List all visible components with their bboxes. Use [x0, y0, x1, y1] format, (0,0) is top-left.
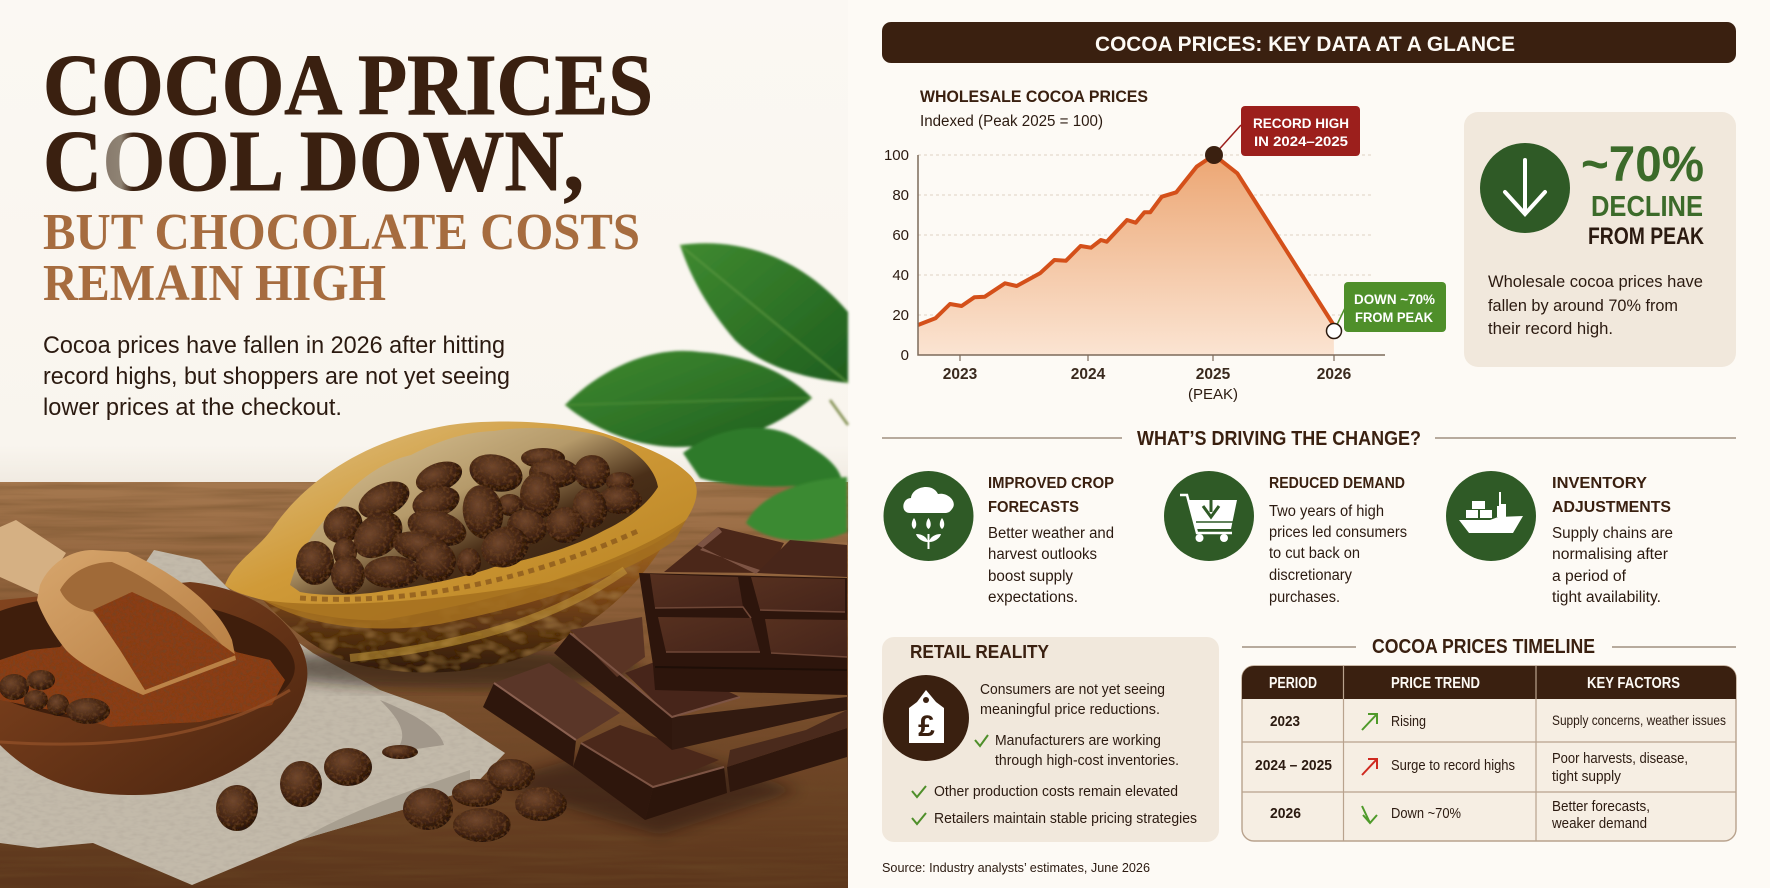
- driver: inventory adjustments: INVENTORY: [1552, 475, 1647, 492]
- driver: reduced demand: purchases.: [1269, 589, 1340, 606]
- icon: pound price tag: [883, 675, 969, 761]
- x axis labels: 2023: [943, 366, 978, 383]
- section heading: what's driving the change: WHAT’S DRIVING THE CHANGE?: [1137, 428, 1421, 450]
- callout: down 70 percent: [1326, 282, 1446, 338]
- table row: 2024 to 2025: Poor harvests, disease,: [1552, 751, 1688, 767]
- title: COCOA PRICES: [43, 36, 653, 133]
- icon: pound price tag: £: [918, 710, 935, 743]
- driver: inventory adjustments: normalising after: [1552, 546, 1668, 563]
- y axis labels: 20: [892, 307, 909, 324]
- table row: 2023: Rising: [1391, 714, 1426, 730]
- checklist: Other production costs remain elevated: [934, 784, 1178, 800]
- driver: inventory adjustments: Supply chains are: [1552, 525, 1673, 542]
- chart heading: [920, 87, 1148, 130]
- icon: stacked dark chocolate bars: [483, 527, 847, 835]
- table: cocoa prices timeline: [1242, 666, 1736, 841]
- cloth: [0, 550, 505, 885]
- title: COOL DOWN,: [43, 112, 584, 209]
- driver: reduced demand: discretionary: [1269, 567, 1352, 584]
- subtitle: [43, 204, 640, 312]
- icon: cocoa pod with beans: [225, 421, 697, 688]
- back bars: [664, 527, 784, 573]
- panel: 70 percent decline: FROM PEAK: [1588, 223, 1705, 250]
- table row: 2024 to 2025: tight supply: [1552, 769, 1622, 785]
- driver: inventory adjustments: ADJUSTMENTS: [1552, 499, 1671, 516]
- driver: reduced demand: Two years of high: [1269, 503, 1384, 520]
- panel: 70 percent decline: [1464, 112, 1736, 367]
- chart heading: WHOLESALE COCOA PRICES: [920, 87, 1148, 106]
- table row: 2026: 2026: [1270, 805, 1301, 822]
- driver: improved crop forecasts: [884, 471, 1114, 606]
- table header row: [1269, 675, 1680, 692]
- driver: improved crop forecasts: FORECASTS: [988, 499, 1079, 516]
- y axis labels: 0: [901, 347, 909, 364]
- driver: reduced demand: prices led consumers: [1269, 524, 1407, 541]
- driver: reduced demand: to cut back on: [1269, 545, 1360, 562]
- intro paragraph: Cocoa prices have fallen in 2026 after hitting: [43, 332, 505, 359]
- checklist: Retailers maintain stable pricing strategies: [934, 811, 1197, 827]
- panel: retail reality: RETAIL REALITY: [910, 641, 1050, 662]
- table row: 2026: Down ~70%: [1391, 806, 1461, 822]
- checklist: Manufacturers are working: [995, 733, 1161, 749]
- table row: 2024 to 2025: 2024 – 2025: [1255, 757, 1332, 774]
- panel: 70 percent decline: fallen by around 70% from: [1488, 296, 1678, 315]
- chart heading: Indexed (Peak 2025 = 100): [920, 113, 1103, 130]
- x axis labels: 2026: [1317, 366, 1352, 383]
- bottom bar: [727, 728, 847, 792]
- panel: hero photo of cocoa and chocolate: [0, 0, 848, 888]
- y axis labels: 100: [884, 147, 909, 164]
- driver: improved crop forecasts: harvest outlooks: [988, 546, 1097, 563]
- panel: retail reality: [882, 637, 1219, 842]
- panel: retail reality: meaningful price reductions.: [980, 702, 1160, 718]
- icon: green cocoa leaves: [565, 243, 848, 541]
- panel: retail reality: Consumers are not yet seeing: [980, 682, 1165, 698]
- table header row: PRICE TREND: [1391, 675, 1480, 692]
- x axis labels: 2024: [1071, 366, 1106, 383]
- panel: 70 percent decline: their record high.: [1488, 319, 1613, 338]
- callout: record high: RECORD HIGH: [1253, 115, 1349, 131]
- driver: improved crop forecasts: Better weather and: [988, 525, 1114, 542]
- driver: inventory adjustments: tight availability.: [1552, 589, 1661, 606]
- intro paragraph: record highs, but shoppers are not yet seeing: [43, 363, 510, 390]
- icon: down arrow: [1480, 143, 1570, 233]
- top bar: [639, 573, 847, 695]
- icon: rain cloud and sprout: [884, 471, 974, 561]
- header bar: key data: COCOA PRICES: KEY DATA AT A GLANCE: [1095, 33, 1515, 56]
- checklist: [912, 733, 1197, 827]
- header bar: key data: [882, 22, 1736, 63]
- driver: reduced demand: REDUCED DEMAND: [1269, 475, 1405, 492]
- panel: 70 percent decline: DECLINE: [1591, 191, 1703, 223]
- subtitle: REMAIN HIGH: [43, 255, 386, 312]
- table row: 2026: [1270, 799, 1650, 832]
- callout: down 70 percent: DOWN ~70%: [1354, 292, 1435, 307]
- callout: down 70 percent: FROM PEAK: [1355, 310, 1433, 325]
- callout: record high: [1205, 106, 1360, 164]
- table header row: PERIOD: [1269, 675, 1317, 692]
- callout: record high: IN 2024–2025: [1254, 133, 1348, 149]
- driver: improved crop forecasts: IMPROVED CROP: [988, 475, 1114, 492]
- intro paragraph: [43, 332, 510, 421]
- panel: 70 percent decline: ~70%: [1581, 136, 1704, 192]
- y axis labels: [884, 147, 909, 364]
- middle bar: [672, 697, 847, 750]
- table row: 2023: [1270, 712, 1726, 730]
- driver: inventory adjustments: a period of: [1552, 568, 1627, 585]
- table header row: KEY FACTORS: [1587, 675, 1680, 692]
- y axis labels: 60: [892, 227, 909, 244]
- line chart: wholesale cocoa prices: [884, 106, 1446, 403]
- icon: loose cocoa beans: [216, 745, 567, 842]
- driver: reduced demand: [1164, 471, 1407, 606]
- y axis labels: 80: [892, 187, 909, 204]
- driver: inventory adjustments: [1446, 471, 1673, 606]
- title: [43, 36, 653, 209]
- table row: 2024 to 2025: [1255, 751, 1688, 785]
- x axis labels: (PEAK): [1188, 386, 1238, 403]
- source note: Source: Industry analysts’ estimates, June 2026: [882, 860, 1150, 875]
- table row: 2026: Better forecasts,: [1552, 799, 1650, 815]
- driver: improved crop forecasts: expectations.: [988, 589, 1078, 606]
- table row: 2026: weaker demand: [1551, 816, 1647, 832]
- intro paragraph: lower prices at the checkout.: [43, 394, 342, 421]
- x axis labels: [943, 366, 1352, 403]
- subtitle: BUT CHOCOLATE COSTS: [43, 204, 640, 261]
- panel: 70 percent decline: Wholesale cocoa prices have: [1488, 272, 1703, 291]
- section heading: timeline: COCOA PRICES TIMELINE: [1372, 636, 1595, 658]
- table row: 2024 to 2025: Surge to record highs: [1391, 758, 1515, 774]
- icon: cargo ship: [1446, 471, 1536, 561]
- checklist: through high-cost inventories.: [995, 753, 1179, 769]
- table row: 2023: Supply concerns, weather issues: [1552, 712, 1726, 728]
- driver: improved crop forecasts: boost supply: [988, 568, 1073, 585]
- y axis labels: 40: [892, 267, 909, 284]
- table row: 2023: 2023: [1270, 713, 1300, 730]
- icon: wooden scoop: [0, 520, 236, 695]
- icon: wooden bowl with cocoa powder: [0, 582, 307, 795]
- icon: shopping cart with arrow: [1164, 471, 1254, 561]
- x axis labels: 2025: [1196, 366, 1231, 383]
